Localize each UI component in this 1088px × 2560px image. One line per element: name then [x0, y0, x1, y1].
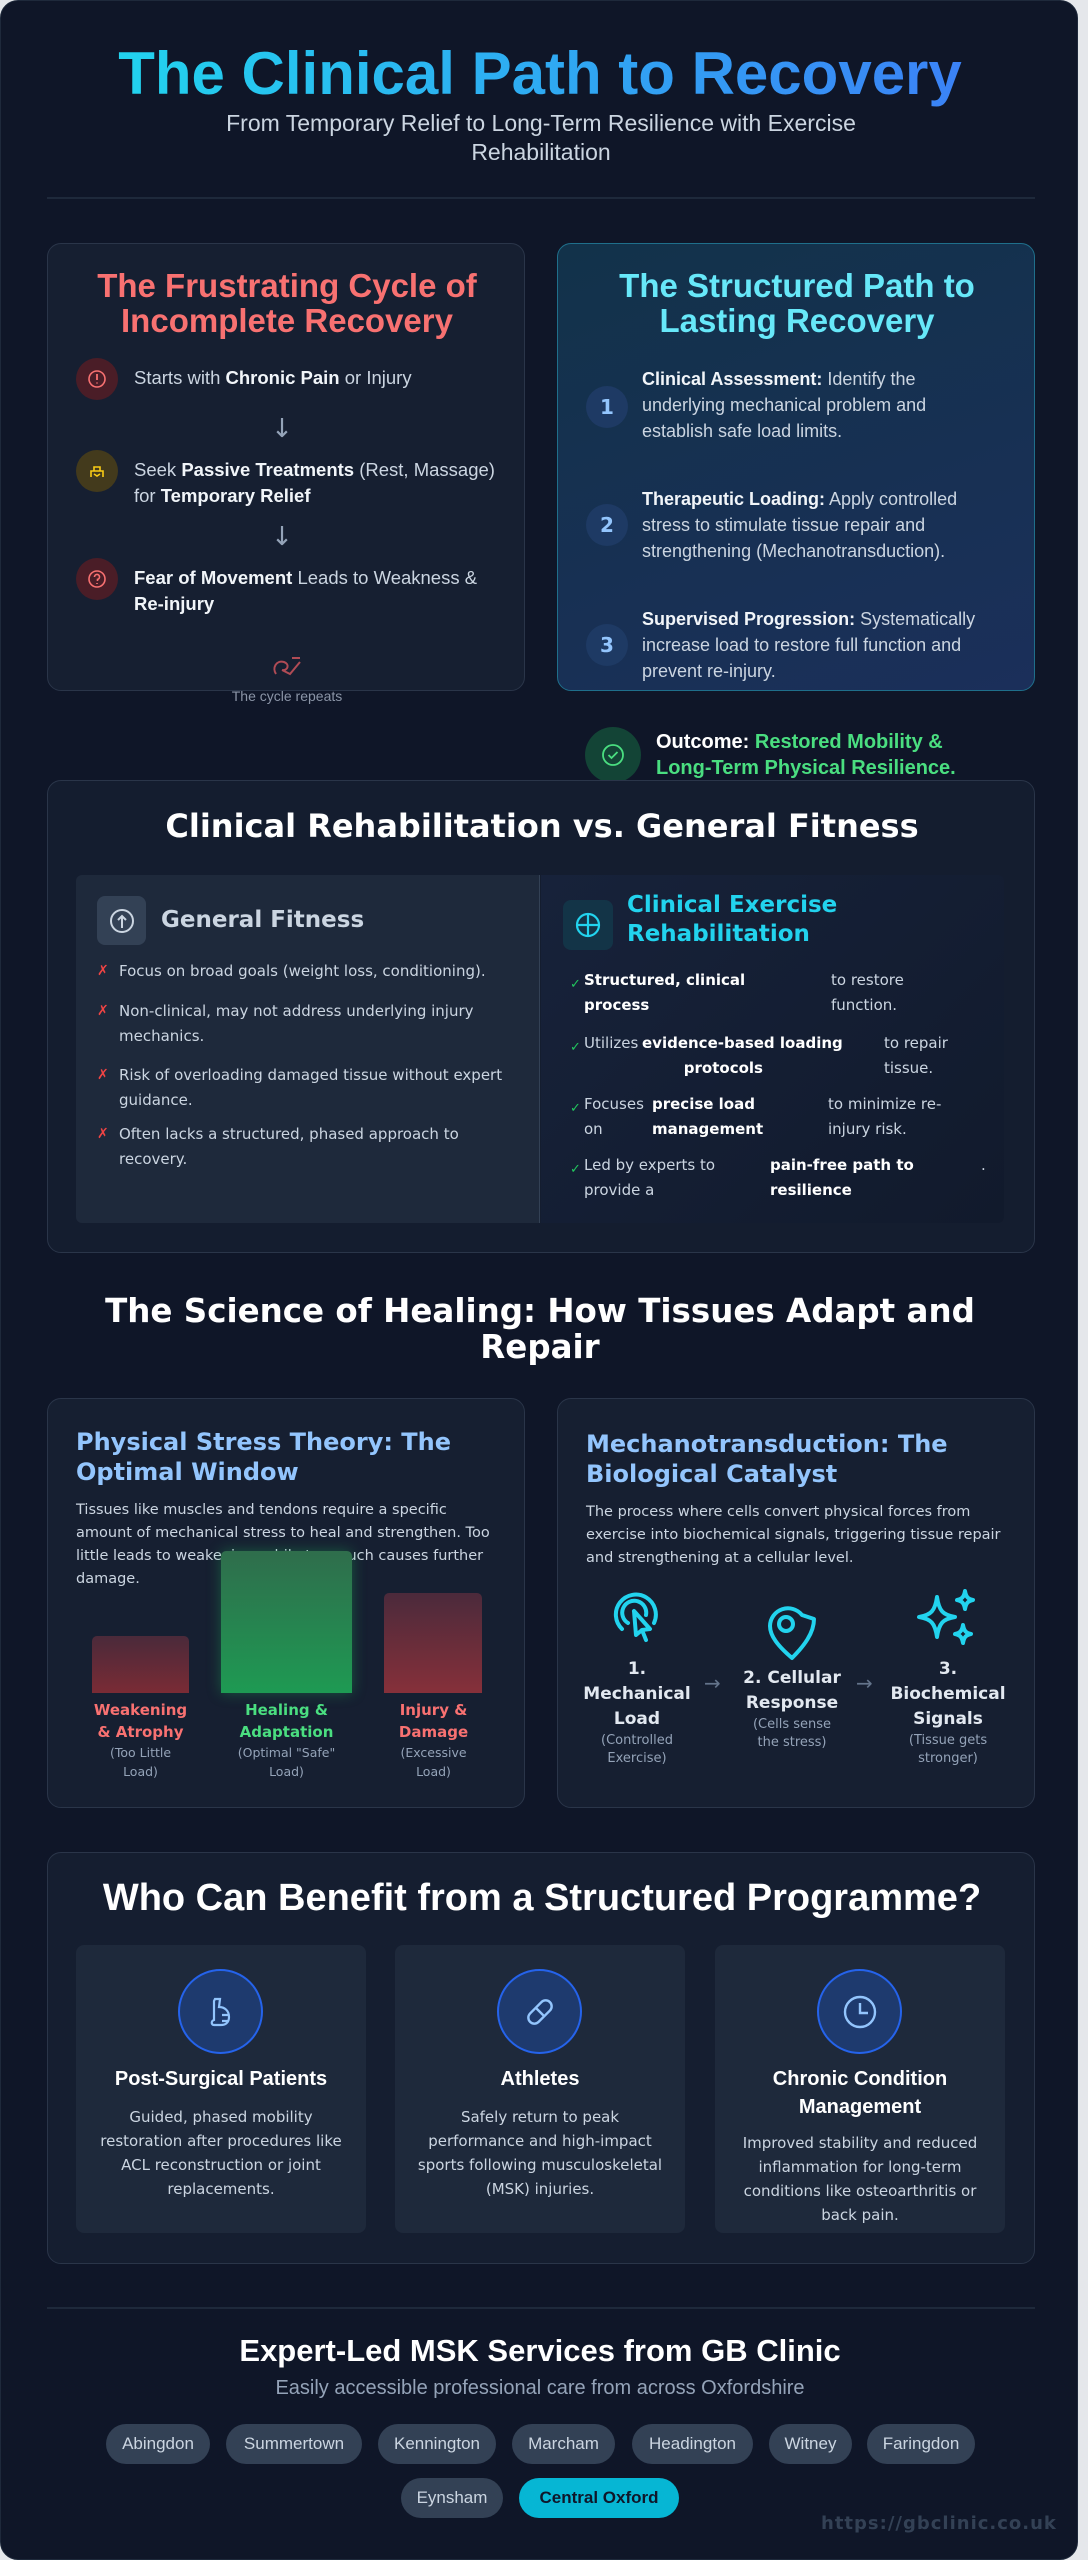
page card: Non-clinical, may not address underlying injury mechanics. [119, 1002, 474, 1045]
page card: ✗ [97, 1126, 109, 1142]
page card: management [652, 1120, 763, 1138]
page card: ✓ [570, 1101, 581, 1116]
page card: Utilizes [584, 1034, 638, 1052]
icon: post-surgical [178, 1969, 263, 2054]
step: mechanical load: (Controlled [601, 1733, 673, 1748]
text: cycle repeats: The cycle repeats [232, 688, 342, 704]
page card: . [981, 1156, 986, 1174]
heading: Clinical Rehabilitation vs. General Fitness [165, 807, 919, 845]
page card: Structured, clinical [584, 971, 745, 989]
page card: precise load [652, 1095, 755, 1113]
heading: clinical: Clinical Exercise [627, 892, 837, 918]
step: cellular response: Response [746, 1693, 838, 1713]
page card: Abingdon [122, 2434, 194, 2453]
panel: physical stress theory [47, 1398, 525, 1808]
page card: Focus on broad goals (weight loss, conditioning). [119, 962, 486, 980]
page card: ✓ [570, 977, 581, 992]
icon: general fitness [97, 896, 146, 945]
step: biochemical signals: 3. [939, 1659, 957, 1679]
page card: Central Oxford [539, 2488, 659, 2507]
heading: cycle [97, 267, 477, 339]
page card: ✓ [570, 1040, 581, 1055]
bar chart [92, 1544, 482, 1779]
step 1: Clinical Assessment: Identify the underlying mechanical problem and establish safe load limits. [642, 369, 926, 441]
icon: alert [76, 358, 118, 400]
page card: to repair [884, 1034, 948, 1052]
list: clinical [570, 971, 986, 1199]
step: biochemical signals: Biochemical [890, 1684, 1006, 1704]
label: weakening: (Too Little [110, 1745, 171, 1760]
card: chronic: Improved stability and reduced inflammation for long-term conditions like osteoarthritis or back pain. [743, 2134, 977, 2224]
icon: passive [76, 450, 118, 492]
step: cellular response: (Cells sense [753, 1717, 831, 1732]
comparison: clinical rehab [541, 875, 1004, 1223]
page card: Risk of overloading damaged tissue without expert guidance. [119, 1066, 502, 1109]
page card: Kennington [394, 2434, 480, 2453]
card: chronic [715, 1945, 1005, 2233]
panel: mechanotransduction [557, 1398, 1035, 1808]
heading: science of healing: The Science of Healing: How Tissues Adapt and Repair [105, 1292, 975, 1366]
step: mechanical load: 1. [628, 1659, 646, 1679]
card: athletes: Safely return to peak performance and high-impact sports following musculoskeletal (MSK) injuries. [418, 2108, 662, 2198]
icon: cycle repeats [273, 657, 301, 676]
heading: Physical Stress Theory: The Optimal Window [76, 1428, 451, 1486]
card: post-surgical [76, 1945, 366, 2233]
step 2: Therapeutic Loading: Apply controlled stress to stimulate tissue repair and strengthening (Mechanotransduction). [642, 489, 957, 561]
arrow: → [704, 1671, 721, 1695]
page card: Eynsham [417, 2488, 487, 2507]
page card: Often lacks a structured, phased approach to recovery. [119, 1125, 459, 1168]
label: healing: Healing & [245, 1701, 328, 1719]
label: weakening: & Atrophy [98, 1723, 183, 1741]
label: weakening: Load) [123, 1764, 158, 1779]
icon: fear [76, 558, 118, 600]
card: post-surgical: Post-Surgical Patients [115, 2068, 327, 2090]
step: biochemical signals [890, 1589, 1006, 1766]
step: mechanical load: Exercise) [607, 1751, 667, 1766]
step: cellular response: the stress) [757, 1735, 826, 1750]
step 2: 2 [600, 513, 614, 537]
label: injury: (Excessive [400, 1745, 467, 1760]
step: cellular response [743, 1606, 841, 1750]
step 1: 1 [600, 395, 614, 419]
heading: clinical [627, 892, 837, 947]
bar: injury [384, 1593, 482, 1693]
page card: Faringdon [883, 2434, 959, 2453]
heading: cycle: Incomplete Recovery [121, 302, 453, 339]
bar: healing [221, 1551, 352, 1693]
url: https://gbclinic.co.uk [821, 2513, 1057, 2534]
panel: structured path [557, 243, 1035, 691]
panel: frustrating cycle [47, 243, 525, 691]
page card: Focuses [584, 1095, 644, 1113]
page card: protocols [684, 1059, 763, 1077]
page card: ✓ [570, 1162, 581, 1177]
step: biochemical signals: stronger) [918, 1751, 978, 1766]
text: fear of movement: Fear of Movement Leads to Weakness & Re-injury [134, 567, 477, 614]
outcome: Outcome: Restored Mobility & Long-Term Physical Resilience. [656, 731, 956, 779]
title: The Clinical Path to Recovery [118, 40, 962, 107]
page card: tissue. [884, 1059, 933, 1077]
card: chronic: Chronic Condition [773, 2068, 947, 2090]
page card: Witney [785, 2434, 836, 2453]
step: mechanical load: Mechanical [583, 1684, 691, 1704]
location pills [106, 2424, 975, 2518]
page card: function. [831, 996, 897, 1014]
heading: structured path [619, 267, 975, 339]
heading: structured path: Lasting Recovery [659, 302, 935, 339]
subtitle: oxfordshire: Easily accessible professional care from across Oxfordshire [275, 2377, 805, 2399]
list: general fitness [97, 962, 502, 1168]
label: healing: (Optimal "Safe" [238, 1745, 335, 1760]
heading: clinical: Rehabilitation [627, 921, 810, 947]
panel: clinical vs general [47, 780, 1035, 1253]
label: healing: Load) [269, 1764, 304, 1779]
heading: Who Can Benefit from a Structured Programme? [103, 1877, 981, 1919]
page card: evidence-based loading [642, 1034, 843, 1052]
step 3: Supervised Progression: Systematically increase load to restore full function and prevent re-injury. [642, 609, 975, 681]
label: injury: Damage [399, 1723, 468, 1741]
page card: Led by experts to [584, 1156, 715, 1174]
page card: injury risk. [828, 1120, 907, 1138]
page card: to restore [831, 971, 904, 989]
text: chronic pain: Starts with Chronic Pain or Injury [134, 367, 412, 388]
bar: weakening [92, 1636, 189, 1693]
page card: ✗ [97, 1067, 109, 1083]
label: weakening: Weakening [94, 1701, 187, 1719]
body text: Tissues like muscles and tendons require a specific amount of mechanical stress to heal and strengthen. Too little leads to weakening, while too much causes further damage. [76, 1502, 490, 1587]
icon: clock [817, 1969, 902, 2054]
heading: Mechanotransduction: The Biological Catalyst [586, 1430, 948, 1488]
page card: resilience [770, 1181, 852, 1199]
step: biochemical signals: Signals [913, 1709, 983, 1729]
page card: to minimize re- [828, 1095, 941, 1113]
arrow: → [856, 1671, 873, 1695]
label: injury: Load) [416, 1764, 451, 1779]
text: passive treatments: Seek Passive Treatments (Rest, Massage) for Temporary Relief [134, 459, 495, 506]
card: athletes: Athletes [501, 2068, 579, 2090]
panel: who can benefit [47, 1852, 1035, 2264]
page card: ✗ [97, 963, 109, 979]
heading: structured path: The Structured Path to [619, 267, 975, 304]
page card: pain-free path to [770, 1156, 914, 1174]
card: post-surgical: Guided, phased mobility restoration after procedures like ACL reconstruction or joint replacements. [100, 2108, 342, 2198]
card: chronic: Management [799, 2096, 921, 2118]
page card: Marcham [528, 2434, 599, 2453]
icon: clinical [563, 900, 613, 950]
icon: athletes [497, 1969, 582, 2054]
step: mechanical load: Load [614, 1709, 660, 1729]
heading: cycle: The Frustrating Cycle of [97, 267, 477, 304]
card: athletes [395, 1945, 685, 2233]
heading: expert-led: Expert-Led MSK Services from GB Clinic [239, 2333, 841, 2368]
page card: Summertown [244, 2434, 344, 2453]
comparison: general fitness [76, 875, 540, 1223]
heading: general fitness: General Fitness [161, 907, 364, 933]
page card: ✗ [97, 1003, 109, 1019]
label: injury [399, 1701, 468, 1779]
label: weakening [94, 1701, 187, 1779]
page card: process [584, 996, 649, 1014]
label: healing [238, 1701, 335, 1779]
step: cellular response: 2. Cellular [743, 1668, 841, 1688]
page card: provide a [584, 1181, 654, 1199]
arrow: ↓ [271, 414, 293, 444]
page card: on [584, 1120, 603, 1138]
label: healing: Adaptation [240, 1723, 333, 1741]
step: mechanical load [583, 1592, 691, 1766]
step 3: 3 [600, 633, 614, 657]
label: injury: Injury & [400, 1701, 467, 1719]
step: biochemical signals: (Tissue gets [909, 1733, 987, 1748]
arrow: ↓ [271, 522, 293, 552]
page card: Headington [649, 2434, 736, 2453]
subtitle: From Temporary Relief to Long-Term Resilience with Exercise Rehabilitation [226, 110, 856, 165]
body text: The process where cells convert physical forces from exercise into biochemical signals, triggering tissue repair and strengthening at a cellular level. [586, 1504, 1001, 1566]
